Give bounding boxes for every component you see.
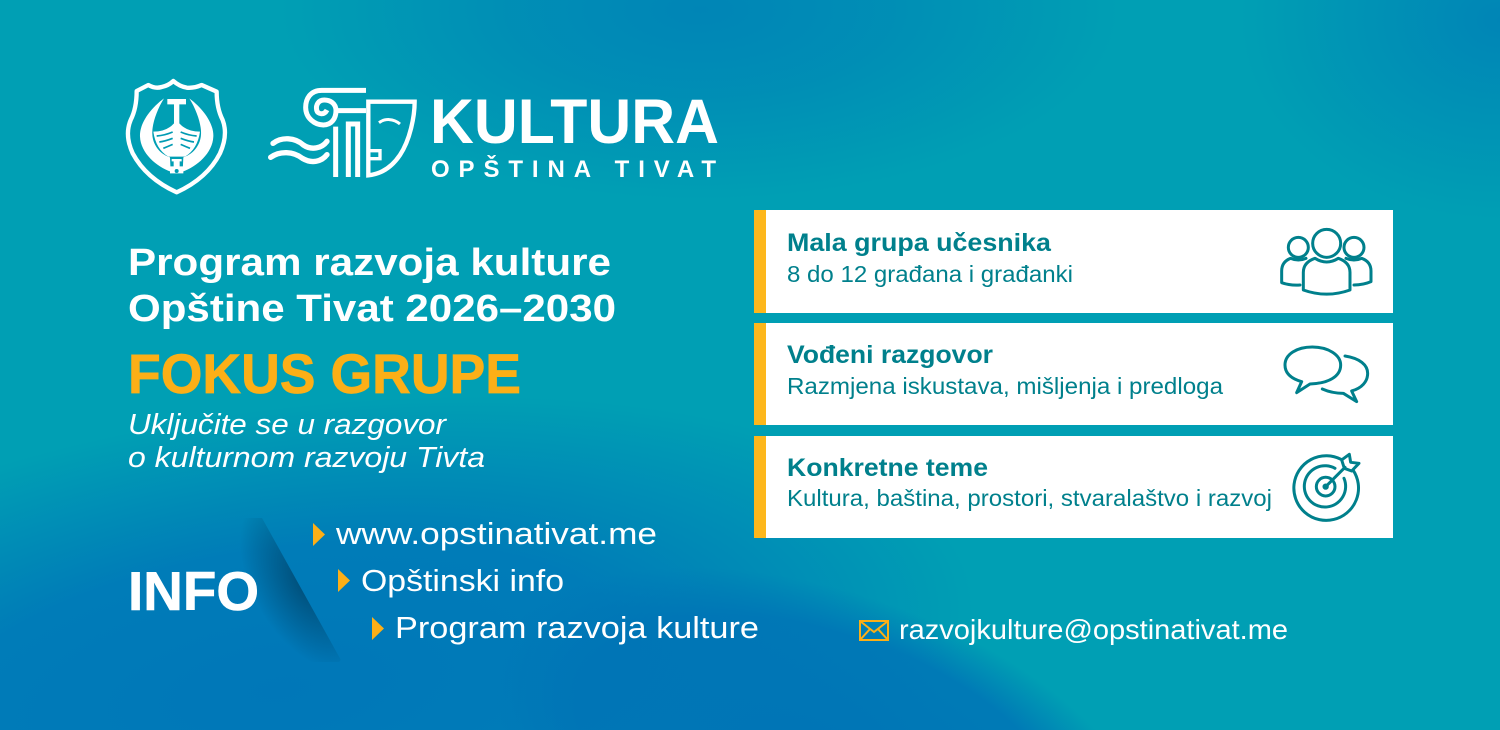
title: fokus grupe: FOKUS GRUPE	[128, 342, 521, 405]
icon: municipal shield	[128, 81, 225, 192]
subtitle	[128, 409, 485, 474]
heading: Opštine Tivat 2026–2030	[128, 288, 616, 330]
info shadow	[248, 518, 340, 660]
info links: Program razvoja kulture	[395, 610, 759, 645]
info label: INFO	[128, 560, 259, 622]
card: konkretne teme	[754, 436, 1393, 538]
heading	[128, 242, 616, 330]
icon: speech bubbles	[1285, 347, 1368, 402]
icon: column, waves and theatre mask	[271, 90, 415, 177]
info links: www.opstinativat.me	[335, 516, 657, 551]
info links	[313, 516, 759, 645]
card: vodeni razgovor: Razmjena iskustava, mišljenja i predloga	[787, 373, 1223, 399]
icon: people	[1282, 229, 1371, 294]
icon: target	[1294, 454, 1359, 520]
card: konkretne teme: Konkretne teme	[787, 454, 988, 482]
logo wordmark: OPŠTINA TIVAT	[431, 155, 716, 183]
heading: Program razvoja kulture	[128, 242, 611, 284]
subtitle: o kulturnom razvoju Tivta	[128, 442, 485, 474]
card: mala grupa	[754, 210, 1393, 313]
card: mala grupa: 8 do 12 građana i građanki	[787, 261, 1073, 287]
card: konkretne teme: Kultura, baština, prostori, stvaralaštvo i razvoj	[787, 485, 1272, 511]
card: mala grupa: Mala grupa učesnika	[787, 229, 1052, 257]
icon: envelope	[860, 621, 888, 640]
logo wordmark: KULTURA	[430, 87, 719, 157]
subtitle: Uključite se u razgovor	[128, 409, 447, 441]
info links: Opštinski info	[361, 563, 564, 598]
card: vodeni razgovor: Vođeni razgovor	[787, 341, 993, 369]
card: vodeni razgovor	[754, 323, 1393, 425]
email: razvojkulture@opstinativat.me	[899, 614, 1288, 645]
